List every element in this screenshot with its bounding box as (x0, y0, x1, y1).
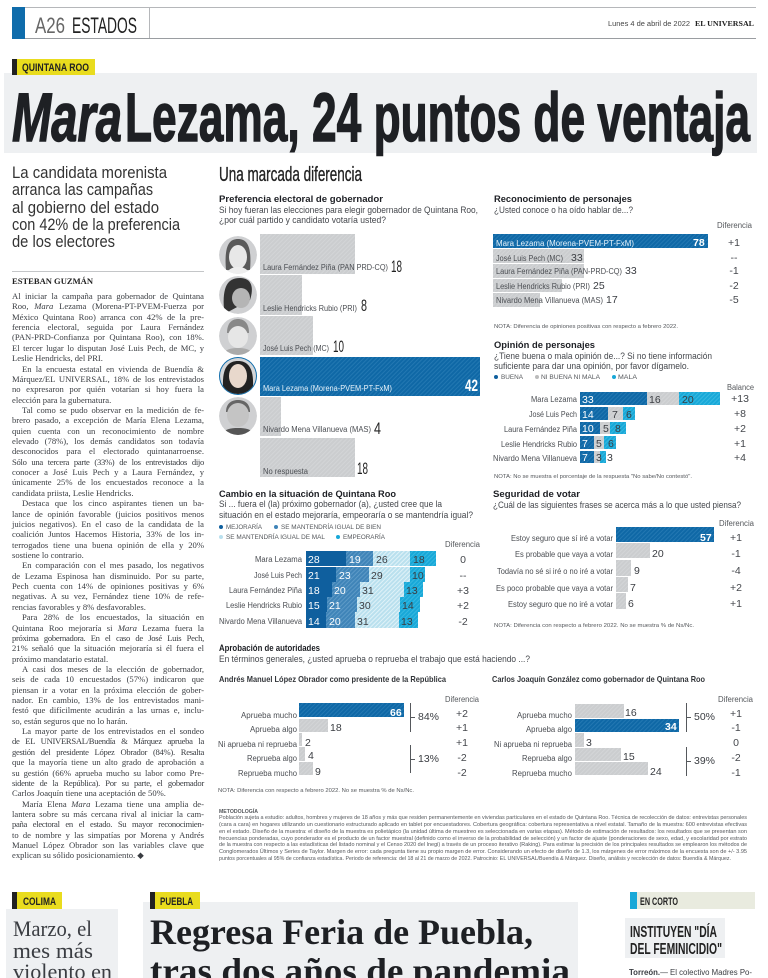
chart: opinión de personajes: ¿Tiene buena o mala opinión de...? Si no tiene información (494, 351, 712, 362)
metodología: (cara a cara) en hogares utilizando un cuestionario estructurado aplicado en tablet por encuestadores. Cobertura geográfica: cobertura representativa a nivel estatal. Tamaño de la muestra: 600 entrevistas efectivas (219, 822, 747, 828)
article body text: México Quintana Roo) arranca con 42% de la pre- (12, 312, 204, 322)
chart: seguridad de votar: 20 (652, 548, 664, 560)
article body text: Al iniciar la campaña para gobernador de Quintana (12, 291, 204, 301)
chart: seguridad de votar: Es poco probable que vaya a votar (496, 584, 613, 593)
metodología (219, 807, 747, 862)
chart: aprobación Carlos Joaquín: -2 (731, 752, 741, 764)
chart: cambio en la situación: 30 (359, 600, 371, 612)
article body text: juicios negativos). En el caso de la candidata de la (12, 519, 204, 529)
chart: opinión de personajes: Balance (727, 383, 755, 392)
heading: aprobación de autoridades: Aprobación de autoridades (219, 643, 320, 654)
legend: BUENA (501, 374, 524, 381)
chart: aprobación Carlos Joaquín: 3 (586, 737, 592, 749)
chart: seguridad de votar: +1 (730, 532, 742, 544)
chart: reconocimiento de personajes: +1 (728, 237, 740, 249)
metodología: frecuencias ponderadas, cuyo ponderador es el producto de un factor muestral (definido como el inverso de la probabilidad de selección) y un factor de ajuste (ponderaciones de sexo, edad, y escolaridad por estrato (219, 836, 747, 842)
chart: seguridad de votar: Todavía no sé si iré o no iré a votar (497, 567, 613, 576)
chart: aprobación Carlos Joaquín: -1 (731, 722, 741, 734)
chart: aprobación Carlos Joaquín: Carlos Joaquín González como gobernador de Quintana Roo (492, 674, 705, 684)
section tag: Quintana Roo (12, 59, 95, 75)
chart: opinión de personajes: Leslie Hendricks Rubio (501, 440, 578, 449)
chart: aprobación Carlos Joaquín: Reprueba algo (522, 754, 573, 763)
article body text: de Lezama Espinosa han disminuido. Por su parte, (12, 571, 204, 581)
chart: aprobación AMLO (218, 674, 480, 794)
metodología: puntos porcentuales al 95% de confianza estadística. Periodo de referencia: del 18 al 21 de marzo de 2022. Patrocinio: EL UNIVERSAL/Buendía & Márquez. Diseño, análisis y recolección de datos: Buendía & Márquez. (219, 856, 731, 862)
article body text: no expresaron por quién votarían si hoy fuera la (12, 384, 204, 394)
chart: reconocimiento de personajes: Laura Fernández Piña (PAN-PRD-CQ) (496, 267, 622, 276)
article body text: desconocidos para el electorado quintanarroense. (12, 446, 204, 456)
story: Colima (6, 892, 118, 978)
chart: reconocimiento de personajes: 78 (693, 237, 705, 249)
article body text: próxima gobernadora. En el caso de José Luis Pech, (12, 633, 204, 643)
story: En corto: Torreón.— El colectivo Madres Po- (629, 968, 752, 977)
chart: seguridad de votar: 7 (630, 582, 636, 594)
article body text: sostiene lo contrario. (12, 550, 84, 560)
legend: NI BUENA NI MALA (541, 374, 601, 381)
article body text: Quintana Roo mejoraría si Mara Lezama fuera la (12, 622, 204, 632)
article body text: quien cuenta con un reconocimiento de nombre (12, 426, 204, 436)
metodología: Población sujeta a estudio: adultos, hombres y mujeres de 18 años y más que residen permanentemente en viviendas particulares en el estado de Quintana Roo. Técnica de recolección de datos: entrevistas personales (219, 815, 747, 821)
deck text (12, 163, 180, 251)
metodología: de la muestra con respecto a las estadísticas del listado nominal y el Censo 2020 del Inegi) a través de un proceso iterativo (Raking). Para estimar la precisión de los principales resultados se emplearon los métodos de (219, 842, 747, 848)
chart: seguridad de votar: +1 (730, 598, 742, 610)
article body text: conocer a José Luis Pech y a Laura Fernández, y (12, 467, 204, 477)
bracket 50% (686, 703, 715, 732)
chart: opinión de personajes: +4 (734, 452, 746, 464)
chart: aprobación Carlos Joaquín (492, 674, 754, 779)
chart: reconocimiento de personajes: 25 (593, 280, 605, 292)
chart: aprobación Carlos Joaquín: Aprueba mucho (517, 711, 573, 720)
chart: seguridad de votar: Diferencia (719, 519, 755, 528)
chart: preferencia electoral: ¿por cuál partido y candidato votaría usted? (219, 215, 386, 226)
article body text: explican su sólido posicionamiento. ◆ (12, 850, 144, 860)
article body text: piensan ir a votar en la próxima elección de gober- (12, 685, 204, 695)
byline: ESTEBAN GUZMÁN (12, 276, 93, 286)
page header (12, 7, 756, 39)
chart: aprobación AMLO: Diferencia (445, 695, 480, 704)
article body text: Carlos Joaquín tiene una aceptación de 50%. (12, 788, 166, 798)
article body text: Para 28% de los encuestados, la situación en (22, 612, 204, 622)
chart: opinión de personajes: 16 (649, 394, 661, 406)
chart: aprobación Carlos Joaquín: Diferencia (718, 695, 754, 704)
article body text: terrogados tiene una buena opinión de ella y 20% (12, 540, 204, 550)
bracket 84%: 84% (418, 711, 439, 723)
chart: cambio en la situación: -2 (458, 616, 468, 628)
chart: cambio en la situación: 10 (412, 570, 424, 582)
article body text: Tal como se pudo observar en la medición de fe- (22, 405, 204, 415)
bars: Mara Lezama (Morena-PVEM-PT-FxM) (263, 384, 392, 393)
section tag: Quintana Roo: QUINTANA ROO (22, 62, 89, 74)
bars: 18 (391, 257, 402, 276)
chart: cambio en la situación: 13 (401, 616, 413, 628)
chart: opinión de personajes: 7 (582, 452, 588, 464)
bars (260, 234, 480, 478)
chart: cambio en la situación: Si ... fuera el (la) próximo gobernador (a), ¿usted cree que la (219, 499, 443, 510)
chart: aprobación AMLO: +1 (456, 737, 468, 749)
chart: cambio en la situación: 18 (413, 554, 425, 566)
chart: aprobación Carlos Joaquín: 16 (625, 707, 637, 719)
story: Puebla: PUEBLA (160, 896, 193, 908)
article body text: Márquez/EL UNIVERSAL, 18% de los entrevistados (12, 374, 204, 384)
bars: 18 (357, 459, 368, 478)
chart: aprobación AMLO: 2 (305, 737, 311, 749)
chart: reconocimiento de personajes: Mara Lezama (Morena-PVEM-PT-FxM) (496, 239, 634, 248)
main title: Mara (12, 79, 122, 156)
article body text: ferencia electoral, seguida por Laura Fernández (12, 322, 204, 332)
bracket 39%: 39% (694, 755, 715, 767)
chart: cambio en la situación: 21 (308, 570, 320, 582)
page header: Lunes 4 de abril de 2022 (608, 21, 690, 28)
story: Colima: COLIMA (23, 896, 56, 908)
chart: preferencia electoral: Si hoy fueran las elecciones para elegir gobernador de Quintana Roo, (219, 205, 478, 216)
chart: opinión de personajes: 10 (582, 423, 594, 435)
chart: reconocimiento de personajes: -- (730, 252, 738, 264)
chart: opinión de personajes: 7 (612, 409, 618, 421)
article body text: festó que difícilmente acudirán a las urnas e, inclu- (12, 705, 204, 715)
chart: opinión de personajes: Nivardo Mena Villanueva (493, 454, 578, 463)
article body text: nador. En cambio, 13% de los entrevistados mani- (12, 695, 204, 705)
chart: seguridad de votar: -4 (731, 565, 741, 577)
story: En corto: EN CORTO (640, 896, 678, 908)
chart: reconocimiento de personajes: Leslie Hendricks Rubio (PRI) (496, 282, 590, 291)
chart: aprobación AMLO: 18 (330, 722, 342, 734)
article body text: to de nombre y las simpatías por Morena y Andrés (12, 830, 204, 840)
article body text: sidente de la República). Por su parte, el gobernador (12, 778, 204, 788)
chart: aprobación Carlos Joaquín: Reprueba mucho (512, 769, 573, 778)
article body text: lantera sobre su más cercana rival al iniciar la cam- (12, 809, 204, 819)
chart: reconocimiento de personajes: 17 (606, 294, 618, 306)
chart: aprobación AMLO: Aprueba mucho (241, 711, 298, 720)
legend: SE MANTENDRÍA IGUAL DE BIEN (281, 522, 381, 531)
story: Puebla: Regresa Feria de Puebla, (150, 912, 533, 952)
article body text: Roo, Mara Lezama (Morena-PT-PVEM-Fuerza por (12, 301, 204, 311)
article body text: paña electoral en el estado. Su mayor reconocimien- (12, 819, 204, 829)
chart: opinión de personajes: suficiente para dar una opinión, por favor dígamelo. (494, 361, 689, 372)
chart: cambio en la situación: -- (460, 570, 467, 582)
chart: seguridad de votar: Seguridad de votar (493, 489, 580, 500)
chart: preferencia electoral: Preferencia electoral de gobernador (219, 194, 383, 205)
bars: Nivardo Mena Villanueva (MAS) (263, 425, 371, 434)
article body text: Sólo una tercera parte (33%) de los entrevistados dijo (12, 457, 204, 467)
article body text: so, están seguros que no lo harán. (12, 716, 128, 726)
chart: reconocimiento de personajes: NOTA: Diferencia de opiniones positivas con respecto a febrero 2022. (494, 324, 679, 330)
chart: cambio en la situación: 19 (349, 554, 361, 566)
chart: cambio en la situación: Leslie Hendricks Rubio (226, 601, 303, 610)
chart: seguridad de votar: Estoy seguro que sí iré a votar (511, 534, 613, 543)
chart: seguridad de votar: 57 (700, 532, 712, 544)
bars: Laura Fernández Piña (PAN PRD-CQ) (263, 263, 388, 272)
chart: cambio en la situación: 14 (402, 600, 414, 612)
chart: aprobación Carlos Joaquín: 15 (623, 751, 635, 763)
chart: aprobación AMLO: 4 (308, 750, 314, 762)
article body text: En comparación con el mes pasado, los negativos (22, 560, 204, 570)
legend: MEJORARÍA (226, 522, 263, 531)
chart: opinión de personajes: +8 (734, 408, 746, 420)
chart: aprobación AMLO: -2 (457, 767, 467, 779)
chart: cambio en la situación: José Luis Pech (254, 571, 302, 580)
chart: seguridad de votar (493, 489, 755, 629)
chart: opinión de personajes: 33 (582, 394, 594, 406)
chart: aprobación Carlos Joaquín: 0 (733, 737, 739, 749)
chart: aprobación AMLO: +2 (456, 708, 468, 720)
article body text: que la mayoría tiene un alto grado de aprobación a (12, 757, 204, 767)
chart: opinión de personajes: 6 (626, 409, 632, 421)
chart: cambio en la situación: 23 (339, 570, 351, 582)
chart: reconocimiento de personajes: -2 (729, 280, 739, 292)
bracket 13% (410, 745, 439, 773)
chart: reconocimiento de personajes: Nivardo Mena Villanueva (MAS) (496, 296, 603, 305)
chart: seguridad de votar: -1 (731, 548, 741, 560)
article body text: 21% señaló que la situación mejoraría si él fuera el (12, 643, 204, 653)
chart: opinión de personajes: 3 (607, 452, 613, 464)
bars: 42 (465, 376, 478, 395)
chart: opinión de personajes: +2 (734, 423, 746, 435)
article body text: elección para la gubernatura. (12, 395, 111, 405)
chart: opinión de personajes: 14 (582, 409, 594, 421)
chart: reconocimiento de personajes: 33 (571, 252, 583, 264)
bracket 84% (410, 703, 439, 732)
legend (494, 374, 638, 381)
chart: cambio en la situación: 31 (362, 585, 374, 597)
chart: cambio en la situación: Laura Fernández Piña (229, 586, 303, 595)
bracket 13%: 13% (418, 753, 439, 765)
heading: aprobación de autoridades (219, 643, 530, 665)
article body text: María Elena Mara Lezama tiene una amplia de- (22, 799, 204, 809)
chart: opinión de personajes: Opinión de personajes (494, 340, 595, 351)
deck text: arranca las campañas (12, 180, 153, 199)
bars: Leslie Hendricks Rubio (PRI) (263, 304, 357, 313)
chart: cambio en la situación (219, 489, 481, 628)
chart: cambio en la situación: 21 (329, 600, 341, 612)
chart: seguridad de votar: NOTA: Diferencia con respecto a febrero 2022. No se muestra % de Ns/Nc. (494, 623, 694, 629)
article body text: En la encuesta estatal en vivienda de Buendía & (22, 364, 204, 374)
legend (219, 522, 386, 541)
heading: Una marcada diferencia: Una marcada diferencia (219, 164, 363, 186)
article body text: La mayor parte de los entrevistados en el sondeo (22, 726, 204, 736)
bars: 4 (374, 419, 381, 438)
article body text: seis de cada 10 encuestados (57%) indicaron que (12, 674, 204, 684)
chart: reconocimiento de personajes: Diferencia (717, 221, 753, 230)
story: En corto: INSTITUYEN "DÍA (630, 922, 717, 941)
chart: aprobación AMLO: Andrés Manuel López Obrador como presidente de la República (219, 674, 446, 684)
chart: preferencia electoral (219, 194, 480, 478)
chart: opinión de personajes: NOTA: No se muestra el porcentaje de la respuesta "No sabe/No contestó". (494, 474, 692, 480)
chart: cambio en la situación: 31 (357, 616, 369, 628)
photo: José Luis Pech (219, 317, 257, 356)
deck text: al gobierno del estado (12, 198, 159, 217)
metodología: Conglomerados Últimos y Series de Taylor. Margen de error: cada pregunta tiene su propio margen de error. Considerando un efecto de diseño de 1.3, los márgenes de error máximos de la encuesta son de +/- 3.95 (219, 848, 747, 855)
chart: aprobación Carlos Joaquín: 34 (665, 721, 677, 733)
deck text: La candidata morenista (12, 163, 167, 182)
legend: SE MANTENDRÍA IGUAL DE MAL (226, 532, 325, 541)
chart: opinión de personajes: +1 (734, 438, 746, 450)
deck text: de los electores (12, 232, 115, 251)
deck text: con 42% de la preferencia (12, 215, 180, 234)
article body text: Leslie Hendricks, del PRI. (12, 353, 103, 363)
article body text: coalición Juntos Hacemos Historia, 33% de los in- (12, 529, 204, 539)
article body text: lance de opinión favorable (juicios positivos menos (12, 509, 204, 519)
chart: reconocimiento de personajes: -1 (729, 265, 739, 277)
article body text: Manuel López Obrador son las variables clave que (12, 840, 204, 850)
chart: aprobación AMLO: NOTA: Diferencia con respecto a febrero 2022. No se muestra % de Ns/Nc. (218, 788, 414, 794)
article body text: rencias favorables y 8% desfavorables. (12, 602, 146, 612)
page header: A26 (35, 13, 65, 38)
chart: reconocimiento de personajes: -5 (729, 294, 739, 306)
chart: reconocimiento de personajes: 33 (625, 265, 637, 277)
chart: opinión de personajes: 8 (615, 423, 621, 435)
bracket 50%: 50% (694, 711, 715, 723)
chart: aprobación AMLO: Ni aprueba ni reprueba (218, 740, 298, 749)
chart: aprobación AMLO: Aprueba algo (250, 725, 298, 734)
photo: Nivardo Mena (219, 397, 257, 436)
chart: cambio en la situación: 13 (406, 585, 418, 597)
chart: opinión de personajes: José Luis Pech (529, 410, 577, 419)
chart: aprobación Carlos Joaquín: -1 (731, 767, 741, 779)
article body text: elevado (78%), los demás candidatos son todavía (12, 436, 204, 446)
bracket 39% (686, 747, 715, 776)
chart: opinión de personajes: 6 (608, 438, 614, 450)
chart: cambio en la situación: +2 (457, 600, 469, 612)
chart: cambio en la situación: 29 (371, 570, 383, 582)
chart: opinión de personajes: 7 (582, 438, 588, 450)
article body text: gestión del presidente López Obrador (84%). Resalta (12, 747, 204, 757)
bars: 8 (361, 296, 367, 315)
chart: aprobación AMLO: 66 (390, 707, 402, 719)
chart: opinión de personajes (493, 340, 755, 480)
chart: opinión de personajes: 5 (603, 423, 609, 435)
chart: aprobación Carlos Joaquín: Aprueba algo (526, 725, 573, 734)
chart: opinión de personajes: +13 (731, 393, 749, 405)
chart: aprobación Carlos Joaquín: +1 (730, 708, 742, 720)
chart: opinión de personajes: 20 (682, 394, 694, 406)
chart: cambio en la situación: 18 (308, 585, 320, 597)
chart: seguridad de votar: 6 (628, 598, 634, 610)
chart: cambio en la situación: 20 (334, 585, 346, 597)
chart: aprobación AMLO: 9 (315, 766, 321, 778)
chart: aprobación AMLO: Reprueba mucho (238, 769, 298, 778)
chart: cambio en la situación: situación en el estado mejoraría, empeoraría o se mantendría igual? (219, 510, 473, 521)
article body text: próximo mandatario estatal. (12, 654, 108, 664)
chart: cambio en la situación: Nivardo Mena Villanueva (219, 617, 303, 626)
chart: cambio en la situación: Mara Lezama (255, 555, 303, 564)
story: Colima: Marzo, el (13, 916, 92, 941)
story: Colima: mes más (13, 938, 93, 963)
article body text: brero pasado, a excepción de María Elena Lezama, (12, 415, 204, 425)
chart: cambio en la situación: Cambio en la situación de Quintana Roo (219, 489, 396, 500)
article body text: de EL UNIVERSAL/Buendía & Márquez aprueba la (12, 736, 204, 746)
article body text: (PAN-PRD-Confianza por Quintana Roo), con 18%. (12, 332, 204, 342)
article body text: Destaca que los cinco aspirantes tienen un ba- (22, 498, 204, 508)
chart: aprobación AMLO: Reprueba algo (247, 754, 298, 763)
chart: reconocimiento de personajes: José Luis Pech (MC) (496, 254, 563, 263)
article body text: su gestión (66% aprueba mucho su labor como Pre- (12, 768, 204, 778)
bars: José Luis Pech (MC) (263, 344, 329, 353)
chart: cambio en la situación: +3 (457, 585, 469, 597)
metodología: METODOLOGÍA (219, 807, 258, 815)
chart: cambio en la situación: 14 (308, 616, 320, 628)
chart: opinión de personajes: Laura Fernández Piña (504, 425, 578, 434)
article body text: El tercer lugar lo disputan José Luis Pech, de MC, y (12, 343, 204, 353)
chart: aprobación Carlos Joaquín: Ni aprueba ni reprueba (494, 740, 573, 749)
article body text: A casi dos meses de la elección de gobernador, (22, 664, 204, 674)
article body text: candidata priista, Leslie Hendricks. (12, 488, 133, 498)
article body text: negativas. A su vez, Fernández tiene 10% de refe- (12, 591, 204, 601)
chart: seguridad de votar: Es probable que vaya a votar (515, 550, 613, 559)
chart: cambio en la situación: 28 (308, 554, 320, 566)
chart: cambio en la situación: Diferencia (445, 540, 481, 549)
photo: Mara Lezama (219, 357, 257, 396)
chart: cambio en la situación: 0 (460, 554, 466, 566)
bars: 10 (333, 337, 344, 356)
bars: No respuesta (263, 467, 309, 476)
chart: aprobación AMLO: -2 (457, 752, 467, 764)
photo: Laura Fernández (219, 236, 257, 274)
chart: reconocimiento de personajes (493, 194, 753, 330)
chart: seguridad de votar: Estoy seguro que no iré a votar (508, 600, 613, 609)
chart: cambio en la situación: 15 (308, 600, 320, 612)
chart: aprobación AMLO: +1 (456, 722, 468, 734)
photo: Leslie Hendricks (219, 276, 257, 314)
chart: cambio en la situación: 20 (329, 616, 341, 628)
article body text (12, 291, 204, 860)
story: En corto (625, 892, 755, 977)
chart: opinión de personajes: 5 (596, 438, 602, 450)
article body text: Pech cuenta con 14% de opiniones positivas y 6% (12, 581, 204, 591)
chart: aprobación Carlos Joaquín: 24 (650, 766, 662, 778)
chart: opinión de personajes: Mara Lezama (531, 395, 578, 404)
legend: MALA (618, 374, 638, 381)
metodología: en el estado. Diseño de la muestra: el diseño de la muestra es polietápico (la unidad última de muestreo es seleccionada en varias etapas). Método de estimación de resultados: los resultados que se presentan son (219, 829, 747, 835)
page header: ESTADOS (72, 13, 137, 38)
chart: reconocimiento de personajes: Reconocimiento de personajes (494, 194, 632, 205)
article body text: únicamente 25% de los encuestados reconoce a la (12, 477, 204, 487)
page header: EL UNIVERSAL (695, 19, 754, 28)
legend: EMPEORARÍA (343, 532, 386, 541)
chart: reconocimiento de personajes: ¿Usted conoce o ha oído hablar de...? (494, 205, 633, 216)
story: Puebla (143, 892, 578, 978)
chart: seguridad de votar: 9 (634, 565, 640, 577)
chart: opinión de personajes: 3 (596, 452, 602, 464)
heading: aprobación de autoridades: En términos generales, ¿usted aprueba o reprueba el trabajo que está haciendo ...? (219, 654, 530, 665)
chart: cambio en la situación: 26 (376, 554, 388, 566)
chart: seguridad de votar: +2 (730, 582, 742, 594)
